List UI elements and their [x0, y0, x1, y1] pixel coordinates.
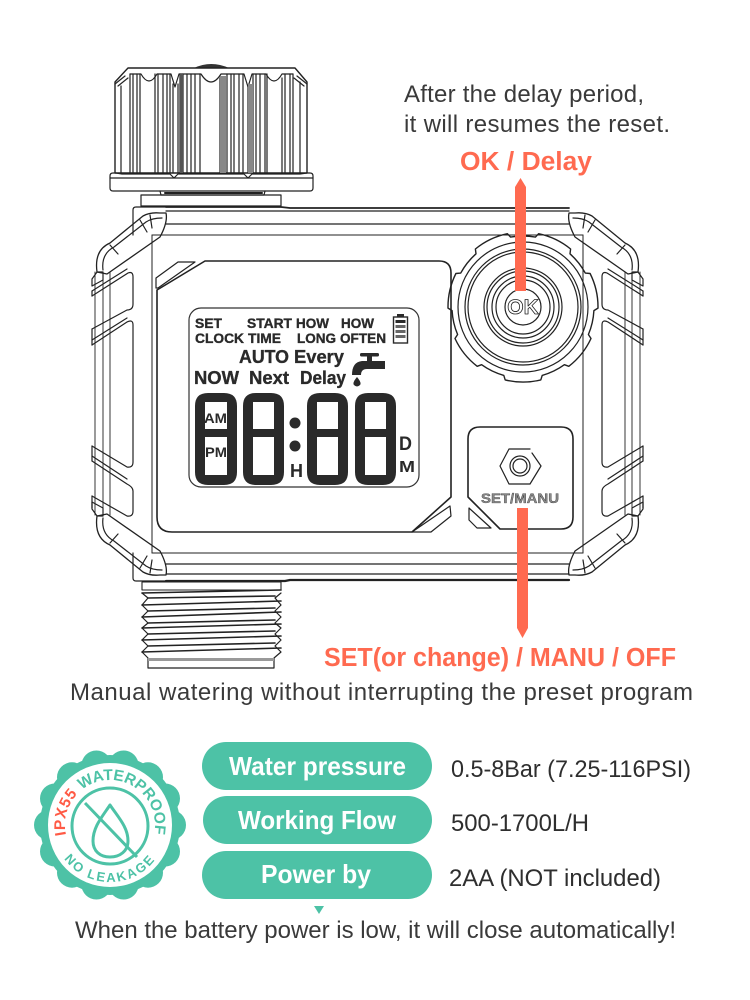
- icon: battery: [394, 314, 408, 343]
- spec row: working flow: 500-1700L/H: [451, 810, 589, 837]
- LCD mode labels: [195, 316, 386, 346]
- LCD status labels: NOW: [194, 368, 239, 388]
- LCD mode labels: START: [247, 316, 293, 331]
- AM PM H D M indicators: AM: [204, 410, 227, 426]
- side grip slots: right: [602, 269, 643, 516]
- LCD mode labels: CLOCK: [195, 331, 244, 346]
- corner bumper: top left: [92, 213, 166, 286]
- device body: [95, 207, 640, 581]
- seven-segment digits: [195, 393, 396, 485]
- LCD mode labels: SET: [195, 316, 223, 331]
- badge text: NO LEAKAGE: [64, 854, 154, 882]
- spec row: working flow: [203, 796, 589, 844]
- LCD status labels: AUTO: [239, 347, 289, 367]
- spec row: water pressure: [202, 742, 691, 790]
- AM PM H D M indicators: PM: [205, 444, 227, 460]
- AM PM H D M indicators: M: [399, 459, 415, 476]
- corner bumper: top right: [569, 213, 643, 286]
- note: manual watering: Manual watering without interrupting the preset program: [70, 679, 693, 706]
- corner bumper: bottom left: [92, 502, 166, 575]
- spec row: working flow: Working Flow: [238, 805, 397, 835]
- note: low battery: When the battery power is low, it will close automatically!: [75, 917, 676, 944]
- side grip slots: left: [92, 269, 133, 516]
- badge scalloped edge: [34, 750, 186, 900]
- screen bezel: [156, 261, 451, 532]
- badge text: WATERPROOF: [76, 769, 166, 834]
- LCD status labels: [194, 347, 346, 388]
- badge text: IPX55: [54, 788, 76, 836]
- spec row: power by: 2AA (NOT included): [449, 865, 661, 892]
- note: delay period: [404, 81, 670, 138]
- note: delay period: After the delay period,: [404, 81, 644, 108]
- device illustration: [92, 64, 643, 668]
- OK label: OK: [507, 296, 539, 319]
- threaded outlet: [142, 582, 281, 668]
- corner bumper: bottom right: [569, 502, 643, 575]
- spec row: power by: Power by: [261, 859, 372, 889]
- LCD status labels: Every: [294, 347, 344, 367]
- heading: SET MANU OFF: SET(or change) / MANU / OFF: [324, 644, 676, 672]
- colon: [290, 418, 300, 452]
- LCD mode labels: HOW: [341, 316, 374, 331]
- icon: small pointer triangle: [314, 906, 324, 914]
- icon: hexagon nut: [500, 449, 541, 484]
- LCD status labels: Delay: [300, 368, 346, 388]
- icon: faucet: [352, 353, 385, 386]
- AM PM H D M indicators: [204, 410, 415, 481]
- arrow: SET/MANU pointer: [517, 508, 528, 638]
- badge text: [54, 769, 166, 882]
- spec row: power by: [202, 851, 661, 899]
- SET/MANU button: [468, 427, 573, 529]
- badge: IPX55 waterproof: [34, 750, 186, 900]
- dial with OK button: [448, 234, 598, 382]
- note: delay period: it will resumes the reset.: [404, 111, 670, 138]
- hose connector cap: [110, 64, 313, 206]
- LCD mode labels: OFTEN: [340, 331, 386, 346]
- heading: OK / Delay: OK / Delay: [460, 148, 593, 176]
- LCD status labels: Next: [249, 368, 289, 388]
- arrow: OK / Delay pointer: [515, 178, 526, 291]
- icon: crossed water drop: [72, 788, 148, 864]
- spec row: water pressure: 0.5-8Bar (7.25-116PSI): [451, 756, 691, 783]
- LCD display: [189, 308, 419, 487]
- AM PM H D M indicators: D: [399, 434, 412, 455]
- LCD mode labels: LONG: [297, 331, 336, 346]
- LCD mode labels: TIME: [248, 331, 281, 346]
- spec row: water pressure: Water pressure: [229, 751, 406, 781]
- SET/MANU label: SET/MANU: [481, 491, 559, 506]
- LCD mode labels: HOW: [296, 316, 329, 331]
- AM PM H D M indicators: H: [290, 461, 303, 481]
